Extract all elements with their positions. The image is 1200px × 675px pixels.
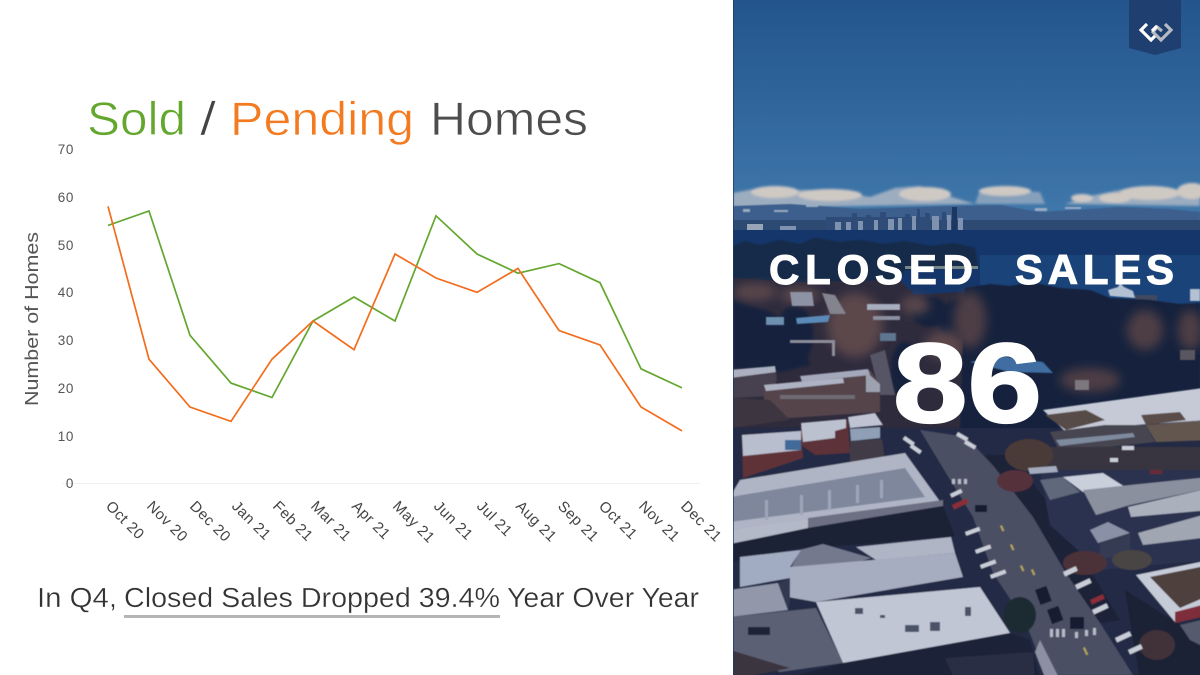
x axis labels — [102, 498, 725, 547]
line: sold — [108, 211, 682, 398]
right side houses — [1028, 466, 1200, 575]
city skyline — [733, 207, 1200, 230]
panel: aerial photo — [720, 0, 1200, 675]
right forest — [960, 282, 1200, 430]
caption: Year Over Year — [507, 582, 699, 613]
title: Pending — [230, 92, 414, 145]
mountains — [733, 204, 1200, 220]
sky — [733, 0, 1200, 222]
caption — [37, 582, 699, 618]
left hillside land — [733, 278, 965, 428]
x axis labels: Oct 21 — [595, 498, 641, 543]
tree point — [733, 238, 978, 285]
x axis labels: Jul 21 — [473, 498, 516, 540]
road — [920, 430, 1133, 675]
y axis labels: 70 — [58, 142, 74, 157]
x axis labels: Aug 21 — [512, 498, 560, 546]
y axis labels: 10 — [58, 429, 74, 444]
x axis labels: Jan 21 — [228, 498, 274, 544]
caption: In Q4, — [37, 582, 117, 613]
y axis labels: 60 — [58, 190, 74, 205]
x axis labels: Dec 21 — [677, 498, 725, 546]
x axis labels: Nov 20 — [143, 498, 191, 546]
road markings — [1000, 525, 1088, 655]
icon: logo chevrons — [1141, 24, 1171, 40]
y axis labels: 50 — [58, 238, 74, 253]
x axis labels: Dec 20 — [186, 498, 234, 546]
solar roof block — [730, 453, 955, 562]
panel: chart background — [0, 0, 733, 675]
photo base — [1199, 319, 1200, 421]
y axis title: Number of Homes — [22, 232, 42, 406]
forest brown trees — [954, 292, 1200, 392]
heading: closed sales — [769, 246, 1174, 293]
title — [87, 92, 588, 145]
centre roofs — [730, 537, 963, 617]
heading: closed sales: SALES — [1015, 246, 1174, 293]
lower town base — [720, 428, 1200, 675]
y axis gridline — [62, 482, 700, 484]
apartment buildings — [730, 366, 880, 428]
right side large roof and shops — [997, 387, 1200, 492]
logo badge — [1129, 0, 1181, 55]
caption: Closed Sales Dropped 39.4% — [124, 582, 500, 613]
x axis labels: Jun 21 — [430, 498, 476, 544]
big number: 86 — [893, 320, 1042, 446]
dark cars and trees — [975, 505, 1084, 633]
big foreground roof — [730, 587, 1060, 675]
lower town — [720, 366, 1200, 675]
x axis labels: May 21 — [389, 498, 438, 547]
x axis labels: Mar 21 — [307, 498, 354, 545]
title: Homes — [430, 92, 588, 145]
parked cars — [903, 432, 1162, 655]
x axis labels: Sep 21 — [554, 498, 602, 546]
heading: closed sales: CLOSED — [769, 246, 973, 293]
red corner building — [1125, 560, 1200, 675]
photo left edge — [733, 0, 734, 675]
small hillside buildings — [766, 292, 1053, 395]
title: Sold — [87, 92, 186, 145]
clouds — [733, 183, 1200, 208]
x axis labels: Feb 21 — [269, 498, 316, 545]
left dark evergreens — [734, 296, 960, 394]
brown leafless trees — [733, 284, 965, 359]
y axis labels: 40 — [58, 285, 74, 300]
snowy peaks — [743, 204, 1081, 212]
y axis labels: 30 — [58, 333, 74, 348]
y axis labels — [58, 142, 74, 491]
line: pending — [108, 206, 682, 431]
brick building and roofs — [742, 413, 885, 478]
point shoreline — [905, 266, 978, 269]
y axis labels: 20 — [58, 381, 74, 396]
y axis labels: 0 — [66, 476, 74, 491]
road shadow side — [985, 455, 1120, 623]
x axis labels: Nov 21 — [635, 498, 683, 546]
lake — [733, 229, 1200, 319]
ships — [1108, 283, 1200, 301]
line chart — [22, 142, 725, 547]
x axis labels: Oct 20 — [102, 498, 148, 543]
caption underline — [124, 615, 500, 618]
title: / — [200, 92, 217, 145]
x axis labels: Apr 21 — [348, 498, 394, 543]
